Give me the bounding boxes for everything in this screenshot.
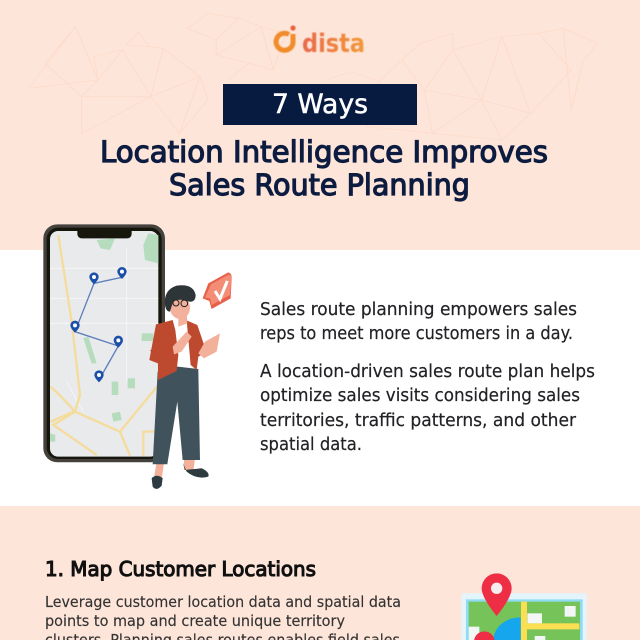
section 1 heading: 1. Map Customer Locations	[45, 557, 316, 581]
icon: check badge	[203, 272, 232, 309]
intro text: reps to meet more customers in a day.	[260, 324, 573, 344]
logo: dista	[276, 25, 365, 59]
illustration: phone with route map	[43, 224, 165, 462]
title badge: 7 Ways: 7 Ways	[272, 89, 368, 120]
icon: logo mark	[276, 25, 296, 50]
icon: small red pin	[474, 631, 495, 640]
map pins	[70, 267, 127, 382]
section 1 body text: Leverage customer location data and spatial data	[45, 593, 401, 611]
intro text: A location-driven sales route plan helps	[260, 362, 595, 382]
route line	[75, 277, 122, 380]
panel: intro band	[0, 250, 640, 506]
section 1 body text	[45, 593, 401, 640]
logo wordmark: dista	[302, 29, 365, 59]
icon: map with pins	[462, 573, 587, 640]
intro text: spatial data.	[260, 435, 362, 455]
section 1 body text: points to map and create unique territory	[45, 612, 345, 630]
intro text: territories, traffic patterns, and other	[260, 411, 577, 431]
intro text: Sales route planning empowers sales	[260, 300, 577, 320]
title: Sales Route Planning	[169, 168, 470, 202]
title	[100, 135, 548, 202]
title: Location Intelligence Improves	[100, 135, 548, 169]
icon: large red pin	[482, 573, 512, 616]
illustration: sales rep with tablet	[149, 272, 232, 489]
title badge: 7 Ways	[223, 84, 417, 125]
intro text: optimize sales visits considering sales	[260, 386, 580, 406]
intro text	[260, 300, 595, 455]
